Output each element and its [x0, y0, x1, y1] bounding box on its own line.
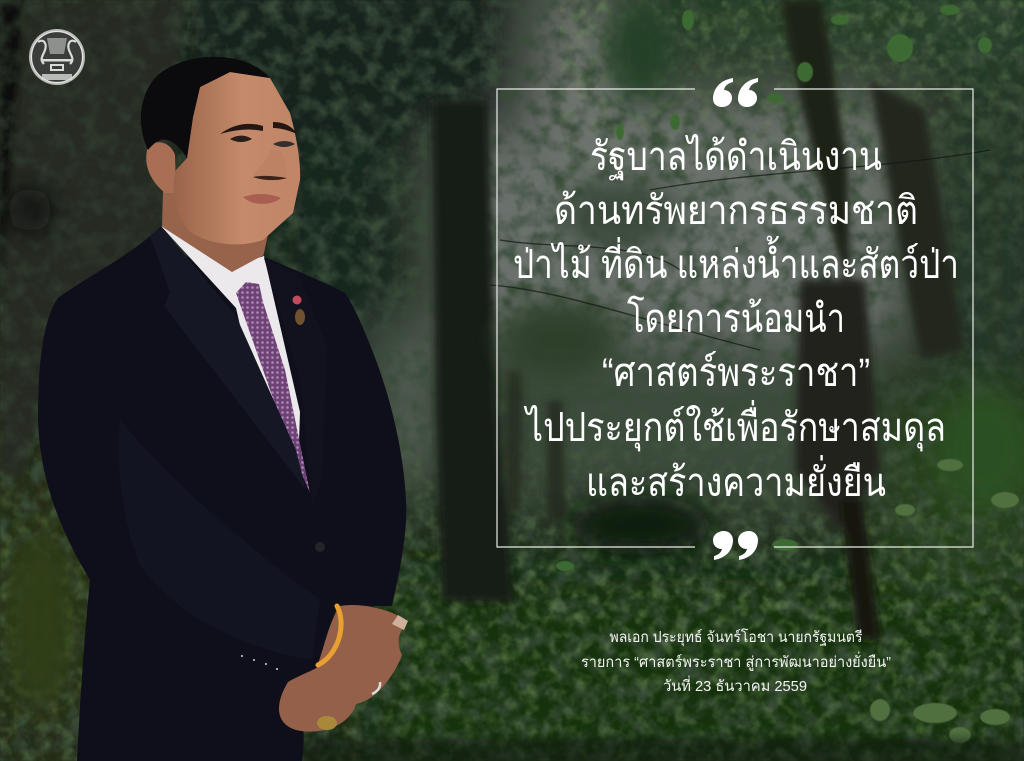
portrait: man in dark suit	[38, 57, 408, 761]
opening quote mark	[713, 78, 758, 107]
necktie	[236, 282, 310, 493]
quote text: ไปประยุกต์ใช้เพื่อรักษาสมดุล	[523, 400, 946, 452]
lapel pins	[292, 296, 302, 304]
orange wristband	[318, 606, 341, 665]
attribution text: วันที่ 23 ธันวาคม 2559	[663, 675, 807, 695]
attribution text: พลเอก ประยุทธ์ จันทร์โอชา นายกรัฐมนตรี	[610, 628, 862, 647]
quote text: “ศาสตร์พระราชา”	[602, 350, 870, 395]
face	[174, 72, 300, 244]
quote text: รัฐบาลได้ดำเนินงาน	[590, 134, 882, 181]
neck	[162, 190, 270, 272]
quote text	[513, 134, 959, 505]
suit jacket	[38, 236, 406, 761]
attribution text	[581, 628, 891, 695]
attribution text: รายการ “ศาสตร์พระราชา สู่การพัฒนาอย่างยั่งยืน”	[581, 651, 891, 671]
button	[315, 542, 325, 552]
quote frame	[497, 89, 973, 547]
lapels	[150, 226, 306, 490]
shirt collar	[161, 226, 300, 470]
hands	[279, 605, 407, 732]
sleeve shading	[119, 420, 320, 660]
eyes	[230, 136, 252, 142]
quote text: ด้านทรัพยากรธรรมชาติ	[554, 189, 918, 233]
ear	[146, 142, 176, 193]
government seal	[29, 29, 85, 85]
eyebrows	[220, 124, 263, 134]
quote text: และสร้างความยั่งยืน	[586, 455, 886, 505]
silver ring	[372, 682, 380, 694]
quote text: โดยการน้อมนำ	[627, 296, 845, 341]
sleeve buttons	[241, 655, 278, 670]
hair	[141, 57, 270, 158]
nose and mouth	[254, 150, 287, 180]
light leaves	[556, 5, 992, 571]
dark trunks	[0, 0, 965, 640]
closing quote mark	[713, 531, 758, 560]
branches	[490, 150, 990, 350]
gold ring	[317, 716, 337, 730]
